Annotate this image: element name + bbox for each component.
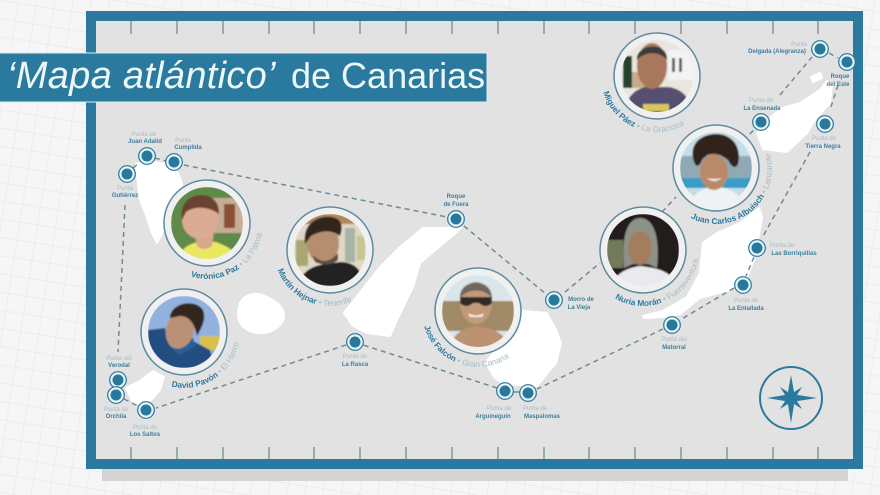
portrait: Juan Carlos Albuisch [673, 125, 759, 211]
label: Punta de La Entallada: Punta de [734, 298, 759, 304]
island: Fuerteventura [643, 208, 762, 318]
title: de Canarias [291, 55, 485, 96]
label: Punta de Las Borriquillas: Punta de [770, 243, 795, 249]
label: Verónica Paz: Verónica Paz • La Palma [192, 233, 262, 279]
label: Roque de Fuera: Roque [447, 194, 466, 200]
route points [108, 41, 855, 418]
label: Punta de Tierra Negra: Punta de [812, 136, 837, 142]
label: Punta de Juan Adalid: Juan Adalid [128, 139, 162, 145]
label: Juan Carlos Albuisch: Juan Carlos Albuisch • Lanzarote [691, 154, 772, 224]
map frame [91, 16, 858, 464]
label: David Pavón: David Pavón • El Hierro [172, 342, 238, 388]
ruler ticks [131, 21, 818, 459]
title: ‘Mapa atlántico’ [7, 55, 276, 97]
icon: compass rose [760, 367, 822, 429]
label: Punta de Las Borriquillas: Las Borriquillas [771, 251, 817, 257]
label: Punta Delgada (Alegranza): Punta [791, 42, 807, 48]
label: Roque de Fuera: de Fuera [443, 202, 469, 208]
portrait: Verónica Paz [164, 180, 250, 266]
island: Tenerife [344, 228, 461, 336]
label: Roque del Este: del Este [826, 82, 850, 88]
label: Punta de Los Saltos: Los Saltos [130, 432, 161, 438]
label: Punta de Arguineguín: Punta de [487, 406, 512, 412]
label: Punta de Orchila: Punta de [104, 407, 129, 413]
title banner [0, 53, 487, 102]
label: Punta de La Entallada: La Entallada [728, 306, 764, 312]
island: La Gomera [238, 294, 284, 333]
label: Punta Cumplida: Cumplida [174, 145, 202, 151]
island: La Palma [136, 161, 184, 243]
label: Martín Hejnar: Martín Hejnar • Tenerife [278, 268, 352, 306]
label: Punta del Matorral: Punta del [661, 337, 687, 343]
label: Punta Gutiérrez: Gutiérrez [112, 193, 138, 199]
label: Punta del Verodal: Verodal [108, 363, 130, 369]
label: Punta del Verodal: Punta del [106, 356, 132, 362]
portrait: José Falcón [435, 268, 521, 354]
portrait: Martín Hejnar [287, 207, 373, 293]
label: Punta de La Rasca: Punta de [343, 354, 368, 360]
name labels on arcs [172, 90, 772, 388]
label: Punta de Los Saltos: Punta de [133, 425, 158, 431]
label: Punta Cumplida: Punta [175, 138, 191, 144]
label: Morro de La Vieja: Morro de [568, 297, 594, 303]
label: Punta de La Rasca: La Rasca [342, 362, 369, 368]
label: Punta de Juan Adalid: Punta de [132, 132, 157, 138]
label: Miguel Páez: Miguel Páez • La Graciosa [604, 90, 684, 132]
route: dashed coastal line [118, 53, 838, 408]
portrait: David Pavón [141, 289, 227, 375]
label: Morro de La Vieja: La Vieja [568, 305, 591, 311]
portrait: Miguel Páez [614, 33, 700, 119]
point labels [104, 42, 850, 438]
label: Punta de Maspalomas: Maspalomas [524, 414, 561, 420]
island: Gran Canaria [486, 311, 561, 386]
label: Punta de Tierra Negra: Tierra Negra [805, 144, 841, 150]
label: Punta de Arguineguín: Arguineguín [475, 414, 511, 420]
label: Nuria Morán: Nuria Morán • Fuerteventura [615, 259, 698, 306]
frame shadow [102, 468, 848, 481]
label: José Falcón: José Falcón • Gran Canaria [424, 326, 510, 367]
label: Punta de La Ensenada: Punta de [749, 98, 774, 104]
label: Punta Gutiérrez: Punta [117, 186, 133, 192]
label: Punta de Orchila: Orchila [106, 414, 127, 420]
label: Punta de Maspalomas: Punta de [523, 406, 548, 412]
island: La Graciosa [811, 73, 822, 82]
portrait: Nuria Morán [600, 207, 686, 293]
label: Punta Delgada (Alegranza): Delgada (Alegranza) [748, 49, 806, 55]
label: Punta del Matorral: Matorral [662, 345, 686, 351]
islands [126, 73, 832, 405]
label: Roque del Este: Roque [831, 74, 850, 80]
island: Lanzarote [757, 81, 832, 152]
island: El Hierro [126, 371, 164, 405]
label: Punta de La Ensenada: La Ensenada [743, 106, 781, 112]
